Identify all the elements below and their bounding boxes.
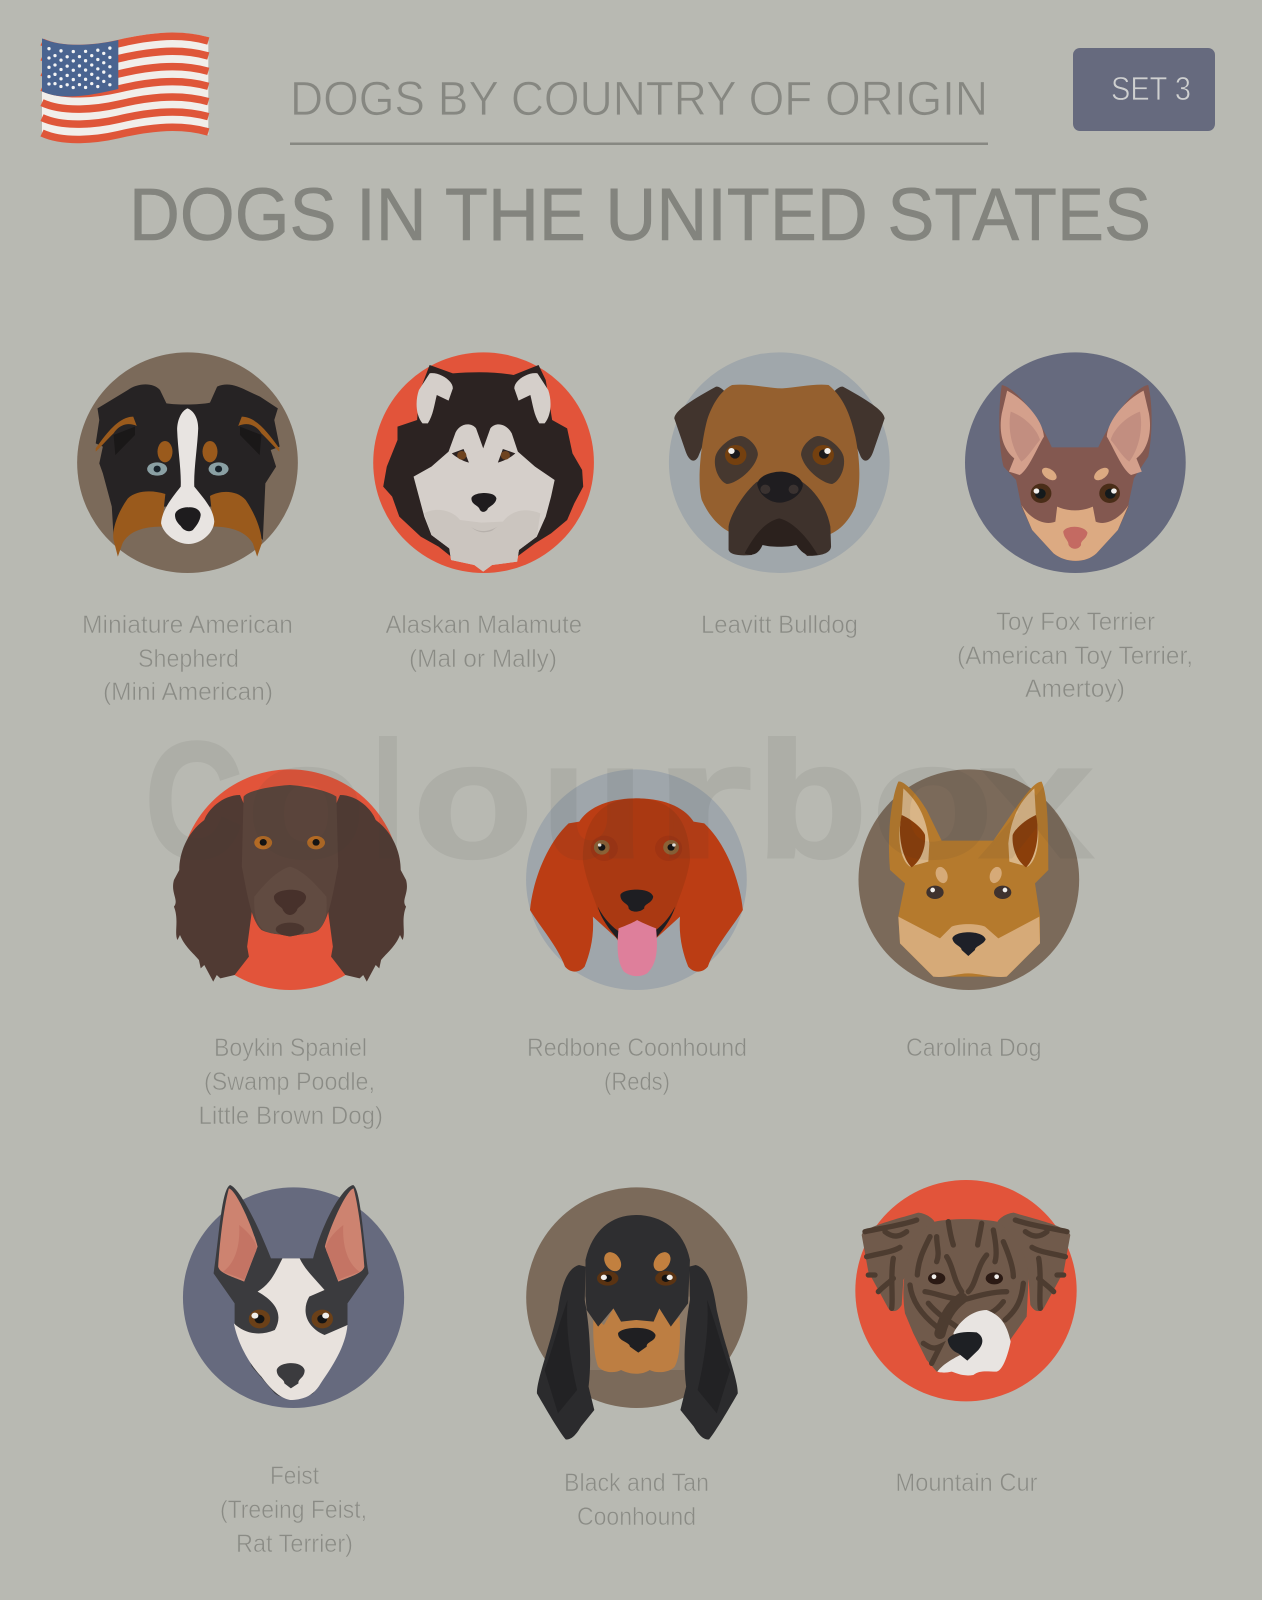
label: redbone coonhound: (Reds): [604, 1068, 670, 1096]
icon: carolina dog: [858, 769, 1079, 990]
watermark: Colourbox: o: [413, 708, 533, 892]
icon: leavitt bulldog: [669, 352, 890, 573]
label: feist: (Treeing Feist,: [220, 1496, 367, 1524]
panel: black and tan coonhound: [526, 1187, 747, 1531]
label: miniature american shepherd: Miniature American: [82, 611, 293, 639]
panel: leavitt bulldog: [669, 352, 890, 639]
badge: set 3: [1073, 48, 1215, 131]
label: black and tan coonhound: Coonhound: [577, 1503, 696, 1531]
label: miniature american shepherd: [82, 611, 293, 706]
label: black and tan coonhound: [564, 1469, 709, 1531]
icon: miniature american shepherd: [77, 352, 298, 573]
label: alaskan malamute: [386, 611, 582, 673]
watermark: Colourbox: l: [372, 708, 404, 892]
label: mountain cur: Mountain Cur: [896, 1469, 1038, 1497]
panel: alaskan malamute: [373, 352, 594, 673]
label: toy fox terrier: Amertoy): [1025, 675, 1125, 703]
watermark: Colourbox: C: [145, 708, 243, 892]
label: toy fox terrier: [957, 608, 1193, 703]
icon: boykin spaniel: [173, 769, 407, 990]
icon: alaskan malamute: [373, 352, 594, 573]
label: feist: Feist: [270, 1462, 319, 1490]
title: DOGS IN THE UNITED STATES: [129, 173, 1151, 256]
subtitle: dogs by country of origin: DOGS BY COUNTRY OF ORIGIN: [290, 73, 988, 126]
watermark: Colourbox: x: [980, 708, 1093, 892]
panel: toy fox terrier: [957, 352, 1193, 703]
label: boykin spaniel: [198, 1034, 383, 1130]
panel: redbone coonhound: [526, 769, 747, 1096]
label: leavitt bulldog: Leavitt Bulldog: [701, 611, 858, 639]
watermark: Colourbox: u: [542, 708, 643, 892]
label: redbone coonhound: [527, 1034, 747, 1096]
label: feist: [220, 1462, 367, 1558]
label: boykin spaniel: Boykin Spaniel: [214, 1034, 367, 1062]
watermark: Colourbox: b: [757, 708, 867, 892]
watermark: Colourbox: o: [247, 708, 365, 892]
icon: black and tan coonhound: [526, 1187, 747, 1439]
panel: feist: [183, 1185, 404, 1558]
label: alaskan malamute: (Mal or Mally): [409, 645, 557, 673]
subtitle underline: [290, 142, 988, 145]
icon: waving US flag: [42, 33, 208, 142]
badge: set 3: SET 3: [1111, 70, 1191, 107]
icon: feist: [183, 1185, 404, 1408]
label: boykin spaniel: (Swamp Poodle,: [204, 1068, 375, 1096]
icon: toy fox terrier: [965, 352, 1186, 573]
panel: miniature american shepherd: [77, 352, 298, 706]
label: miniature american shepherd: Shepherd: [138, 645, 239, 673]
watermark: Colourbox: r: [654, 708, 752, 892]
label: toy fox terrier: Toy Fox Terrier: [996, 608, 1155, 636]
label: boykin spaniel: Little Brown Dog): [198, 1102, 383, 1130]
watermark: Colourbox: o: [872, 708, 993, 892]
icon: mountain cur: [855, 1180, 1077, 1401]
label: feist: Rat Terrier): [236, 1530, 353, 1558]
panel: mountain cur: [855, 1180, 1077, 1497]
label: miniature american shepherd: (Mini American): [103, 678, 273, 706]
label: redbone coonhound: Redbone Coonhound: [527, 1034, 747, 1062]
label: carolina dog: Carolina Dog: [906, 1034, 1042, 1062]
label: alaskan malamute: Alaskan Malamute: [386, 611, 582, 639]
panel: carolina dog: [858, 769, 1079, 1062]
label: toy fox terrier: (American Toy Terrier,: [957, 642, 1193, 670]
icon: redbone coonhound: [526, 769, 747, 990]
label: black and tan coonhound: Black and Tan: [564, 1469, 709, 1497]
panel: boykin spaniel: [173, 769, 407, 1130]
